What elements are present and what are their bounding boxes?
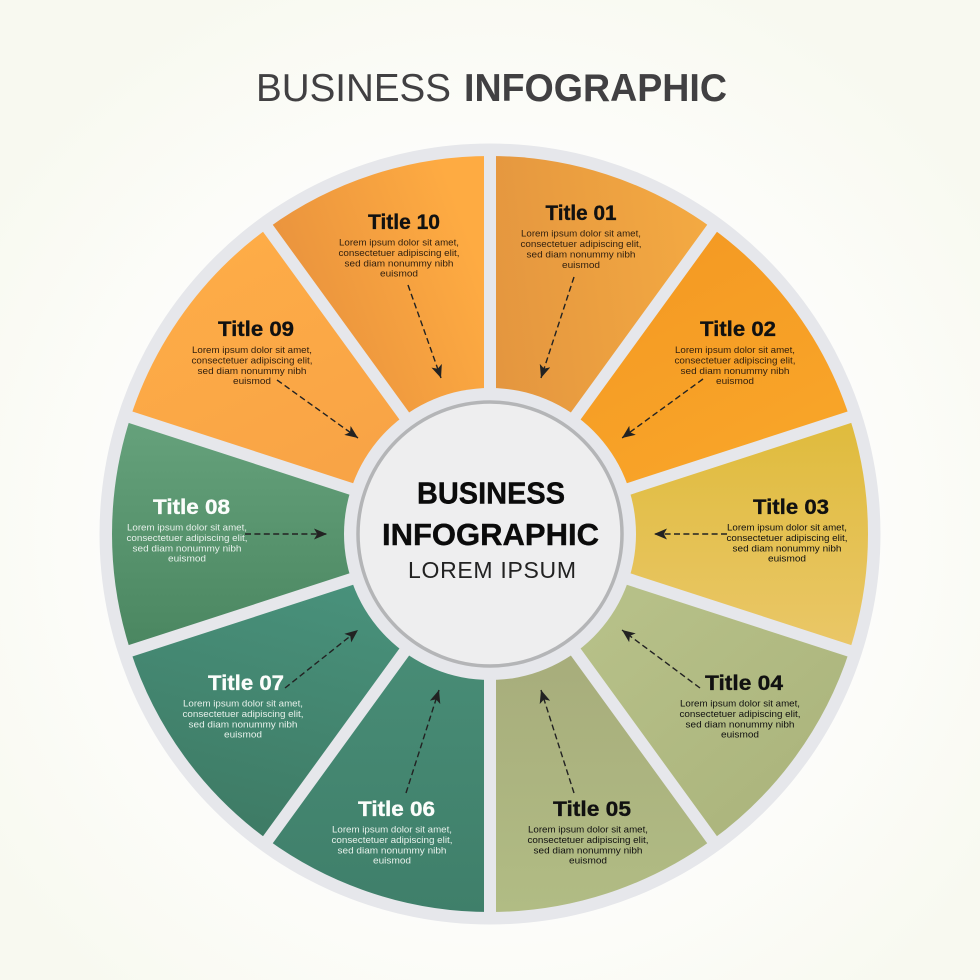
wedge 04 (490, 534, 850, 840)
text block 10: sed diam nonummy nibh (344, 258, 454, 268)
text block 09 (192, 344, 312, 386)
wedge 05 (490, 534, 712, 912)
wedge 06 (268, 534, 490, 912)
text block 04: consectetuer adipiscing elit, (680, 708, 800, 719)
panel: title 03 (490, 417, 868, 651)
text block 06: sed diam nonummy nibh (338, 844, 446, 856)
text block 03: euismod (768, 552, 806, 564)
panel: title 08 (112, 417, 490, 651)
panel: title 10 (268, 156, 490, 534)
text block 02: euismod (716, 375, 754, 386)
text block 10: euismod (380, 268, 418, 278)
hub heading: BUSINESS (417, 476, 565, 510)
text block 04 (680, 698, 800, 740)
text block 07: euismod (224, 728, 262, 740)
text block 07 (182, 698, 304, 740)
text block 02 (674, 344, 796, 386)
heading 03: Title 03 (753, 495, 829, 519)
heading 09: Title 09 (218, 317, 294, 341)
wedge 09 (130, 228, 490, 534)
text block 09: sed diam nonummy nibh (198, 365, 306, 376)
panel: title 09 (130, 228, 490, 534)
heading 07: Title 07 (208, 671, 284, 695)
wedge 07 (130, 534, 490, 840)
arrow 01 (541, 277, 574, 378)
hub heading (382, 476, 599, 552)
text block 08 (126, 522, 248, 564)
heading 08: Title 08 (153, 495, 230, 519)
arrow 07 (285, 630, 358, 688)
wedge 01 (490, 156, 712, 534)
text block 07: Lorem ipsum dolor sit amet, (183, 698, 303, 708)
text block 02: sed diam nonummy nibh (680, 365, 790, 376)
panel: title 02 (490, 228, 850, 534)
text block 06 (332, 824, 452, 866)
arrow 08 (245, 533, 327, 535)
panel: title 06 (268, 534, 490, 912)
text block 10 (338, 236, 460, 278)
arrow 03 (654, 533, 727, 535)
text block 01: Lorem ipsum dolor sit amet, (521, 228, 641, 238)
text block 04: euismod (721, 728, 759, 740)
arrow 06 (406, 690, 439, 793)
panel: title 05 (490, 534, 712, 912)
arrow 10 (408, 285, 441, 378)
hub heading: INFOGRAPHIC (382, 517, 599, 552)
text block 06: euismod (373, 854, 411, 866)
text block 09: euismod (233, 375, 271, 386)
text block 07: sed diam nonummy nibh (188, 718, 298, 730)
text block 03: Lorem ipsum dolor sit amet, (727, 522, 847, 532)
wedge 08 (112, 417, 490, 651)
text block 08: euismod (168, 552, 206, 564)
text block 09: consectetuer adipiscing elit, (192, 354, 312, 366)
text block 05: consectetuer adipiscing elit, (528, 834, 648, 845)
text block 04: sed diam nonummy nibh (686, 718, 794, 730)
text block 03: sed diam nonummy nibh (732, 542, 842, 554)
hub subtitle: LOREM IPSUM (408, 557, 576, 583)
hub disk (358, 402, 622, 666)
panel: title 04 (490, 534, 850, 840)
panel: title 07 (130, 534, 490, 840)
heading 02: Title 02 (700, 317, 776, 341)
arrow 05 (541, 690, 574, 793)
panel: title 01 (490, 156, 712, 534)
text block 03 (726, 522, 848, 564)
heading 04: Title 04 (705, 671, 783, 695)
text block 02: Lorem ipsum dolor sit amet, (675, 344, 795, 355)
text block 04: Lorem ipsum dolor sit amet, (680, 698, 800, 708)
text block 01: consectetuer adipiscing elit, (520, 238, 642, 249)
heading 01: Title 01 (546, 201, 617, 225)
text block 06: consectetuer adipiscing elit, (332, 834, 452, 845)
arrow 02 (622, 379, 703, 438)
wedge 10 (268, 156, 490, 534)
main title: BUSINESS (256, 67, 451, 110)
hub backing ring (344, 388, 636, 680)
text block 10: Lorem ipsum dolor sit amet, (339, 236, 459, 248)
text block 02: consectetuer adipiscing elit, (674, 354, 796, 366)
text block 06: Lorem ipsum dolor sit amet, (332, 824, 452, 834)
text block 08: Lorem ipsum dolor sit amet, (127, 522, 247, 532)
text block 09: Lorem ipsum dolor sit amet, (192, 344, 312, 355)
arrow 04 (622, 630, 700, 688)
heading 05: Title 05 (553, 797, 631, 821)
heading 06: Title 06 (358, 797, 435, 821)
main title: INFOGRAPHIC (464, 67, 727, 110)
wedge 03 (490, 417, 868, 651)
text block 03: consectetuer adipiscing elit, (726, 532, 848, 543)
text block 07: consectetuer adipiscing elit, (182, 708, 304, 719)
outer ring (100, 144, 880, 924)
text block 08: consectetuer adipiscing elit, (126, 532, 248, 543)
main title (256, 67, 727, 110)
text block 01: euismod (562, 259, 600, 270)
text block 05: euismod (569, 854, 607, 866)
wedge 02 (490, 228, 850, 534)
panel: centre hub (344, 388, 636, 680)
arrow 09 (277, 380, 358, 438)
text block 05 (528, 824, 648, 866)
text block 05: Lorem ipsum dolor sit amet, (528, 824, 648, 834)
text block 01 (520, 228, 642, 270)
heading 10: Title 10 (368, 210, 440, 234)
text block 01: sed diam nonummy nibh (526, 248, 636, 260)
text block 05: sed diam nonummy nibh (534, 844, 642, 856)
text block 08: sed diam nonummy nibh (132, 542, 242, 554)
text block 10: consectetuer adipiscing elit, (338, 247, 460, 258)
